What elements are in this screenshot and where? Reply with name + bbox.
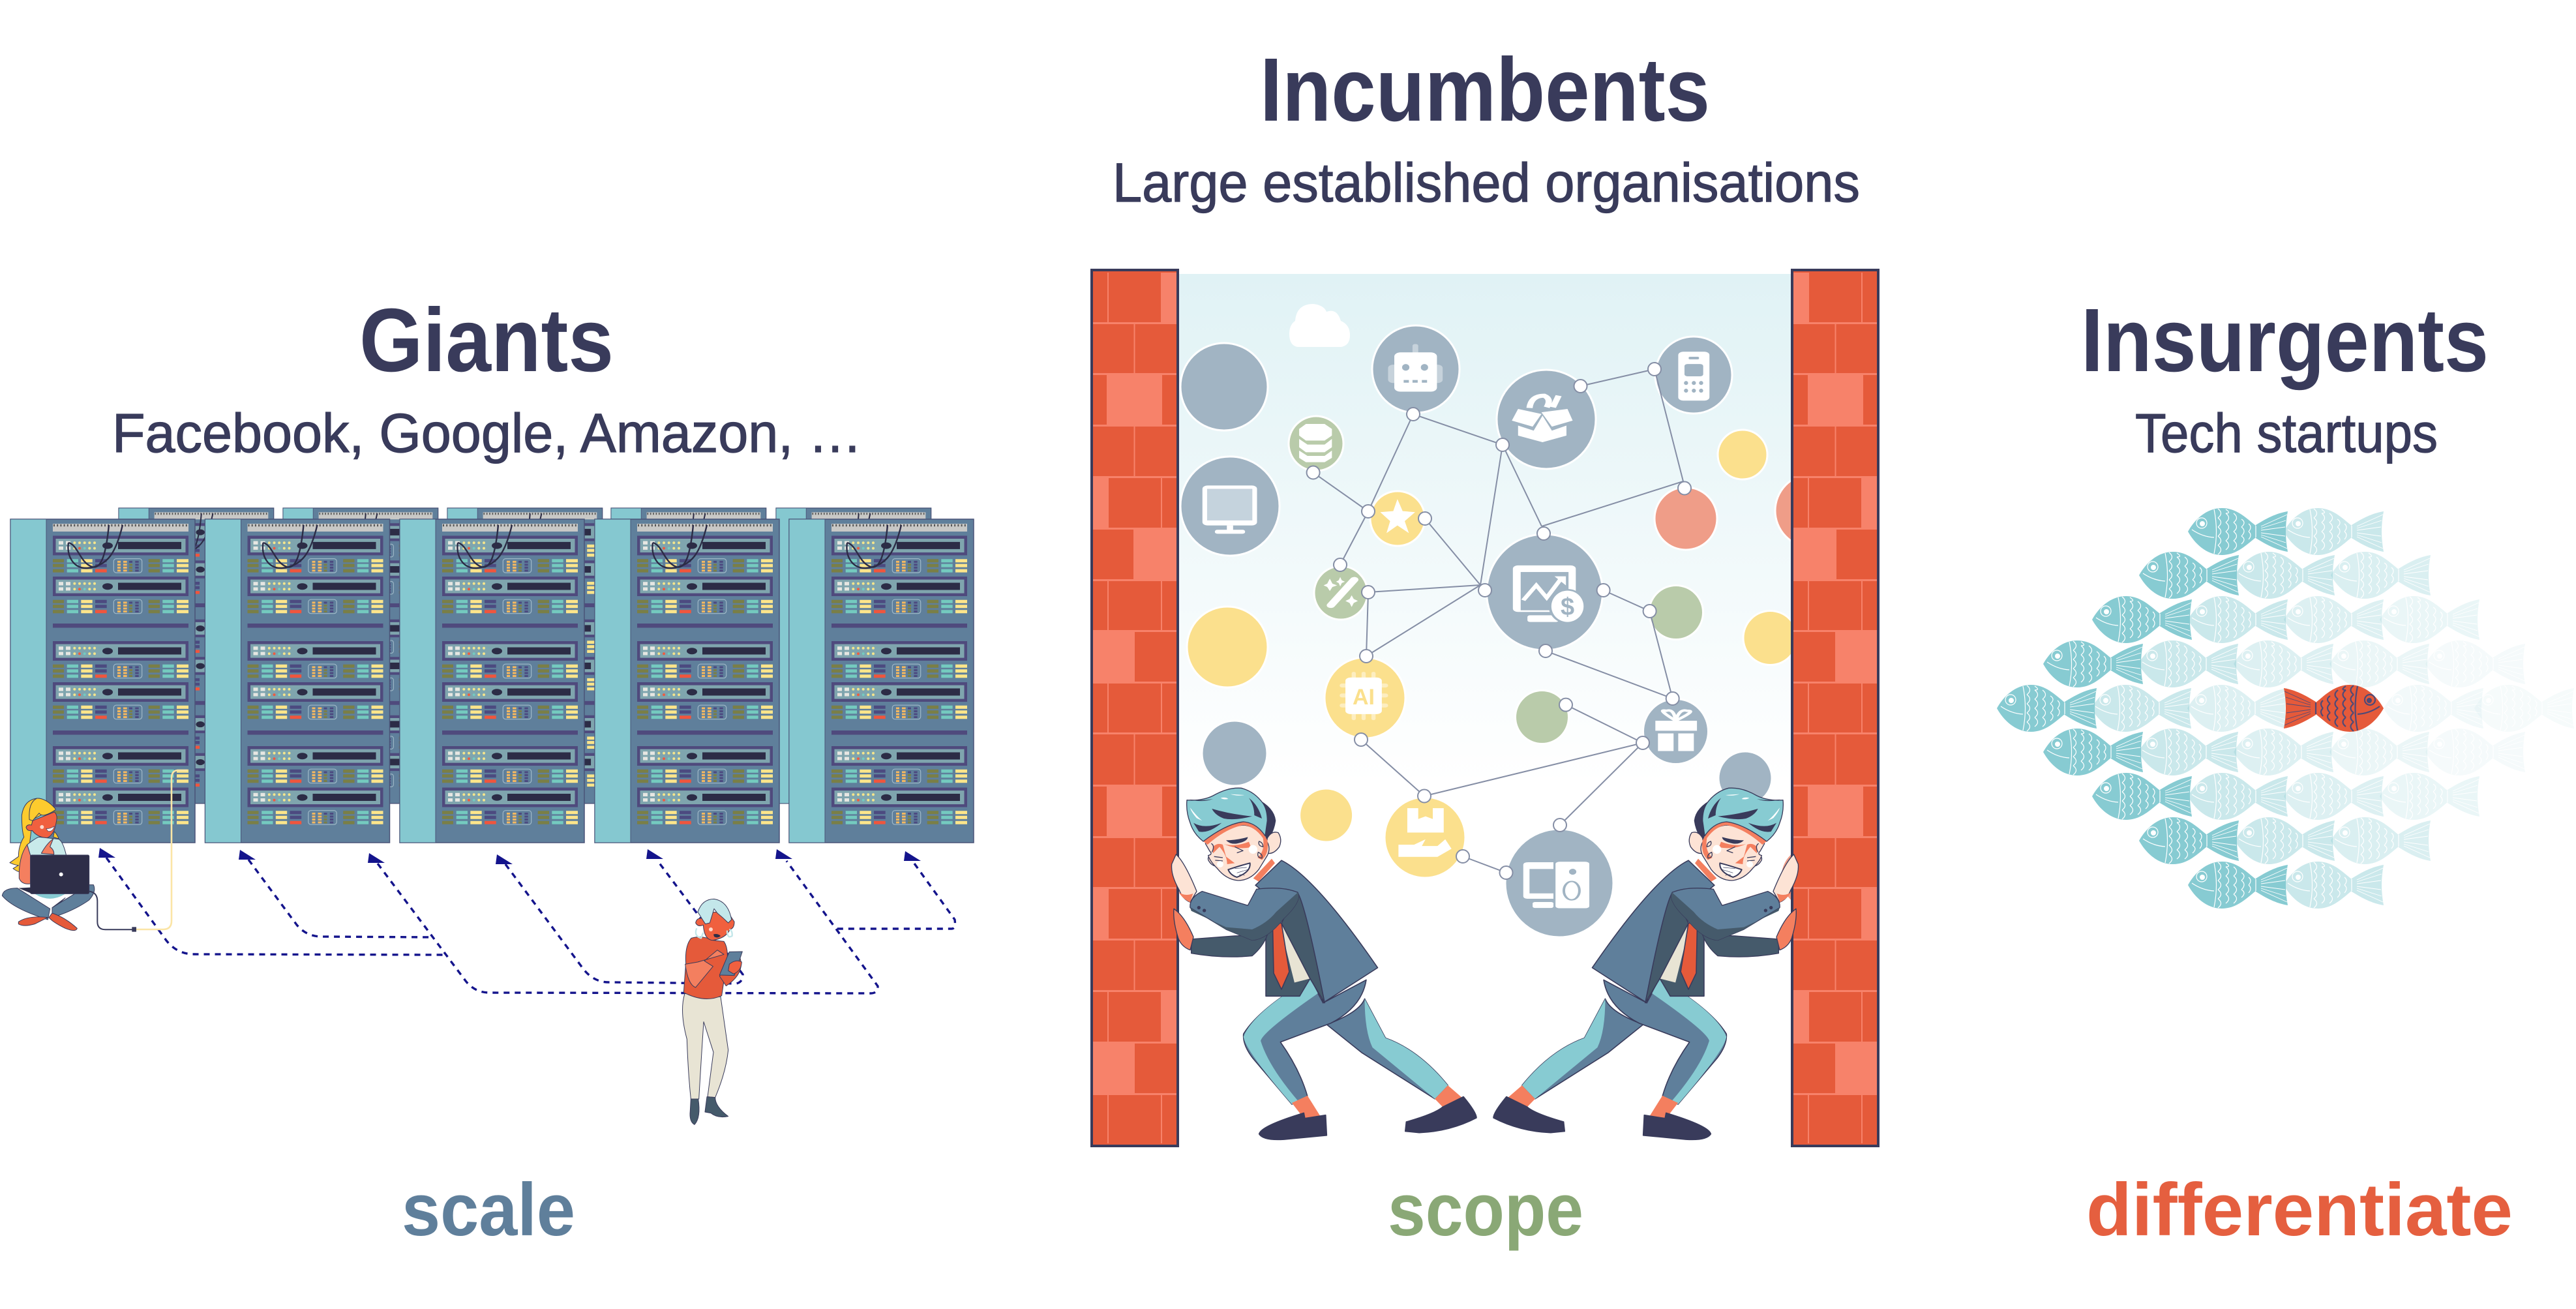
- server racks: [10, 508, 974, 843]
- icon: open box: [1512, 396, 1573, 442]
- AI label: AI: [1353, 685, 1375, 710]
- heading: Incumbents: Incumbents: [1260, 40, 1710, 140]
- figure: businessman pushing left wall: [1171, 788, 1476, 1139]
- red fish swimming the other way: [2284, 685, 2384, 732]
- icon: magic wand: [1324, 577, 1358, 607]
- figure: woman with laptop: [2, 798, 136, 932]
- label: differentiate: differentiate: [2086, 1169, 2513, 1252]
- connector lines: [1313, 369, 1683, 873]
- left brick wall: [1092, 270, 1178, 1146]
- subheading: Incumbents description: Large established organisations: [1113, 152, 1860, 213]
- right brick wall: [1792, 270, 1878, 1146]
- icon: phone: [1678, 352, 1709, 400]
- heading: Giants: Giants: [359, 290, 614, 391]
- white icon glyphs: [1203, 344, 1709, 751]
- label: scope: scope: [1388, 1169, 1583, 1252]
- icon: cloud: [1289, 304, 1350, 347]
- back row of racks: [119, 508, 931, 804]
- icon: sales monitor: [1513, 565, 1586, 624]
- subheading: Insurgents description: Tech startups: [2135, 402, 2438, 464]
- dollar label: $: [1561, 594, 1574, 621]
- icon: robot: [1388, 344, 1443, 392]
- dashed network arrows: [98, 848, 955, 993]
- icon: monitor: [1203, 485, 1257, 534]
- figure: woman with tablet: [683, 899, 742, 1124]
- icons: hand with parcel and desktop speaker: [1398, 808, 1589, 909]
- connector nodes: [1307, 363, 1691, 879]
- front row of racks: [10, 519, 974, 843]
- network of product circles: [1180, 304, 1848, 937]
- plain circles: [1180, 343, 1848, 910]
- icon: AI chip: [1340, 672, 1388, 720]
- yellow cable: [136, 770, 187, 929]
- icon circles: [1180, 325, 1732, 937]
- fish school: [1997, 508, 2574, 909]
- panel: scope sky background: [1178, 274, 1791, 783]
- subheading: Giants examples: Facebook, Google, Amazon, …: [112, 402, 862, 464]
- icon: database: [1299, 424, 1332, 462]
- figure: businessman pushing right wall: [1493, 788, 1799, 1139]
- label: scale: scale: [402, 1169, 575, 1252]
- icon: parcel on hand: [1398, 808, 1452, 857]
- icon: star: [1380, 499, 1415, 533]
- icon: gift: [1655, 710, 1697, 751]
- heading: Insurgents: Insurgents: [2081, 290, 2489, 391]
- icon: desktop speaker: [1523, 862, 1589, 909]
